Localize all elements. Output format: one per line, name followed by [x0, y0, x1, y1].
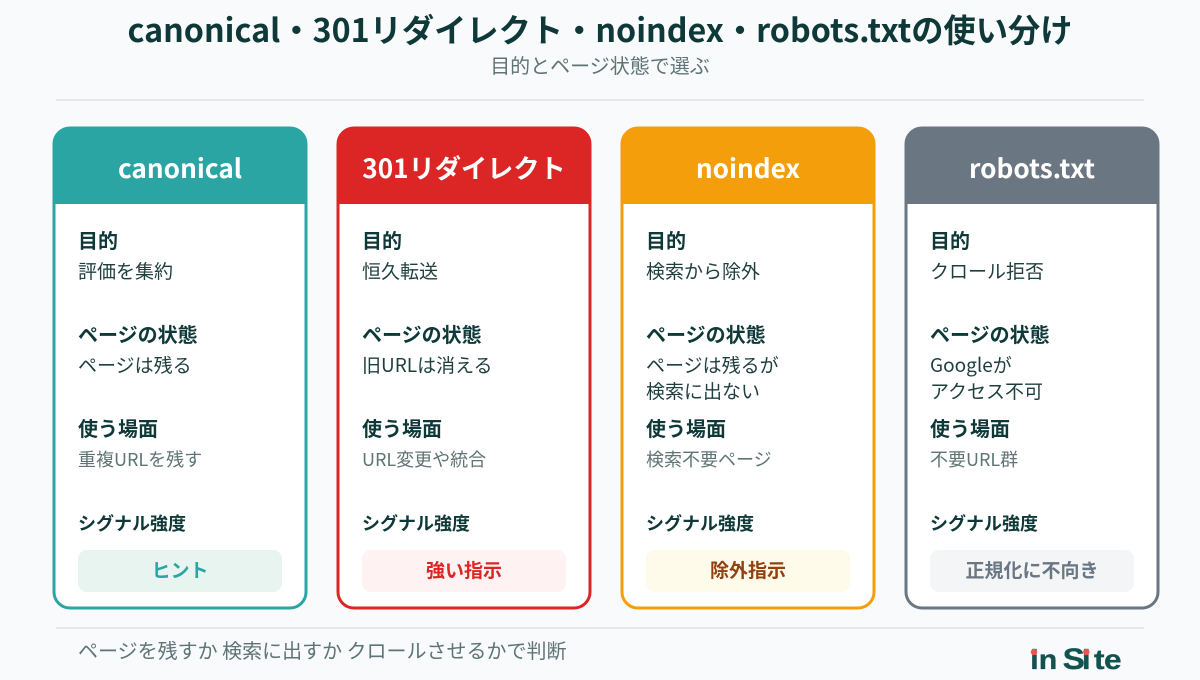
page state value — [930, 351, 1043, 404]
signal label: シグナル強度 — [646, 510, 754, 536]
use case label: 使う場面 — [362, 413, 442, 442]
signal badge: 除外指示 — [710, 556, 786, 583]
title: canonical・301リダイレクト・noindex・robots.txtの使い分け — [127, 6, 1073, 52]
panel: canonical — [52, 126, 308, 610]
signal badge: ヒント — [151, 556, 208, 583]
use case label: 使う場面 — [646, 413, 726, 442]
signal badge — [362, 550, 566, 592]
footer note: ページを残すか 検索に出すか クロールさせるかで判断 — [78, 635, 567, 664]
page state label: ページの状態 — [646, 319, 766, 348]
signal badge — [78, 550, 282, 592]
signal label: シグナル強度 — [930, 510, 1038, 536]
page state label: ページの状態 — [930, 319, 1050, 348]
signal badge: 正規化に不向き — [965, 556, 1098, 583]
signal badge: 強い指示 — [426, 556, 502, 583]
page state value: 検索に出ない — [646, 377, 760, 404]
page state value: Googleが — [930, 351, 1012, 378]
use case label: 使う場面 — [930, 413, 1010, 442]
panel: 301 redirect — [336, 126, 592, 610]
page state value: アクセス不可 — [930, 377, 1043, 404]
signal badge — [930, 550, 1134, 592]
logo: in Site — [1030, 644, 1122, 674]
purpose label: 目的 — [362, 225, 402, 254]
panel: noindex — [620, 126, 876, 610]
page state label: ページの状態 — [362, 319, 482, 348]
purpose label: 目的 — [930, 225, 970, 254]
card header: robots.txt: robots.txt — [969, 148, 1095, 186]
purpose value: 検索から除外 — [646, 257, 760, 284]
card header: canonical: canonical — [118, 148, 242, 186]
purpose label: 目的 — [78, 225, 118, 254]
panel: robots.txt — [904, 126, 1160, 610]
use case value: 検索不要ページ — [646, 446, 772, 472]
use case value: 重複URLを残す — [78, 446, 202, 472]
signal label: シグナル強度 — [78, 510, 186, 536]
signal badge — [646, 550, 850, 592]
card header: 301 redirect: 301リダイレクト — [362, 148, 566, 186]
page state value: ページは残るが — [646, 351, 779, 378]
card header: noindex: noindex — [696, 148, 800, 186]
use case label: 使う場面 — [78, 413, 158, 442]
signal label: シグナル強度 — [362, 510, 470, 536]
page state value: 旧URLは消える — [362, 351, 493, 378]
page state value: ページは残る — [78, 351, 192, 378]
use case value: 不要URL群 — [930, 446, 1018, 472]
page state value — [646, 351, 779, 404]
page state label: ページの状態 — [78, 319, 198, 348]
use case value: URL変更や統合 — [362, 446, 486, 472]
purpose value: 評価を集約 — [78, 257, 173, 284]
purpose value: クロール拒否 — [930, 257, 1044, 284]
subtitle: 目的とページ状態で選ぶ — [490, 50, 710, 79]
purpose value: 恒久転送 — [362, 257, 438, 284]
purpose label: 目的 — [646, 225, 686, 254]
